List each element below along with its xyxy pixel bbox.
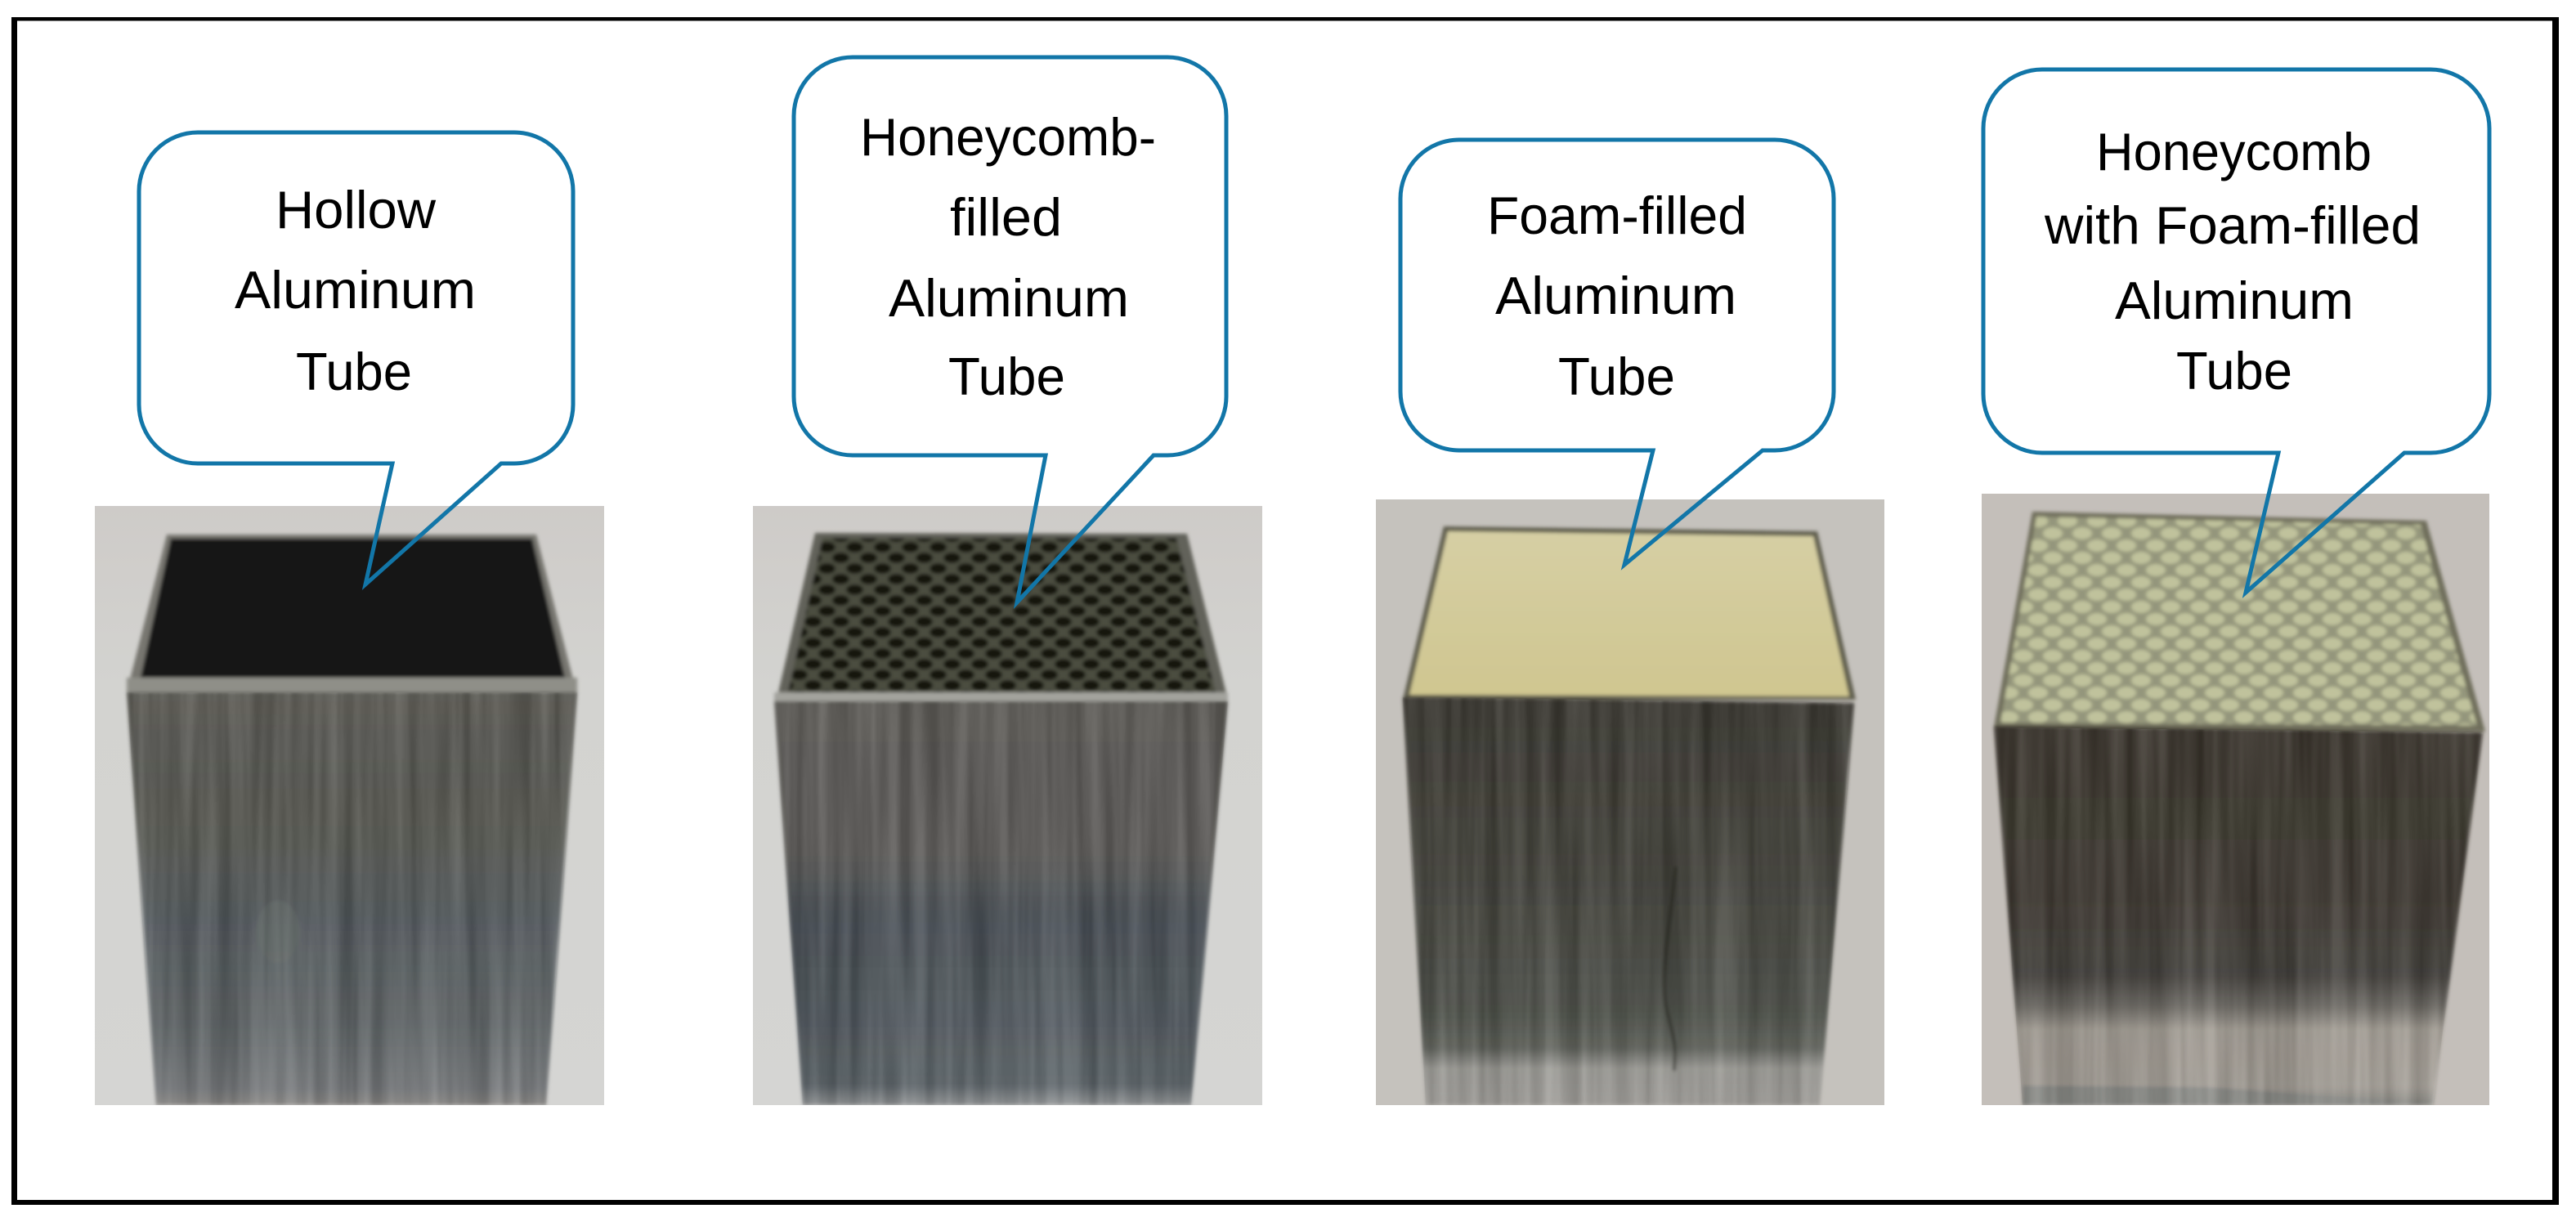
callout: honeycomb with foam-filled aluminum tube: Honeycomb <box>2096 122 2372 181</box>
photo: honeycomb with foam-filled aluminum tube <box>1982 494 2489 1105</box>
callout: honeycomb with foam-filled aluminum tube <box>1983 69 2489 593</box>
callout: hollow aluminum tube: Tube <box>296 342 412 401</box>
callout: honeycomb with foam-filled aluminum tube: Tube <box>2176 341 2292 401</box>
callout: honeycomb-filled aluminum tube: Tube <box>948 347 1065 406</box>
photo: hollow aluminum tube <box>95 506 604 1105</box>
callout: honeycomb-filled aluminum tube: Honeycomb- <box>860 107 1156 167</box>
callout: hollow aluminum tube <box>139 132 573 584</box>
callout: foam-filled aluminum tube: Aluminum <box>1495 266 1736 325</box>
callout: foam-filled aluminum tube: Foam-filled <box>1487 186 1747 245</box>
callout: honeycomb-filled aluminum tube: Aluminum <box>889 268 1129 328</box>
callout: honeycomb with foam-filled aluminum tube: with Foam-filled <box>2044 195 2421 255</box>
callout: hollow aluminum tube: Aluminum <box>235 260 476 320</box>
callout: foam-filled aluminum tube: Tube <box>1558 347 1675 406</box>
callout: hollow aluminum tube: Hollow <box>276 180 437 239</box>
callout: honeycomb-filled aluminum tube: filled <box>950 187 1062 247</box>
photo: honeycomb-filled aluminum tube <box>753 506 1262 1105</box>
photo: foam-filled aluminum tube <box>1376 499 1884 1105</box>
callout: honeycomb with foam-filled aluminum tube: Aluminum <box>2115 271 2354 330</box>
callout: honeycomb-filled aluminum tube <box>794 57 1226 602</box>
callout: foam-filled aluminum tube <box>1400 140 1834 565</box>
